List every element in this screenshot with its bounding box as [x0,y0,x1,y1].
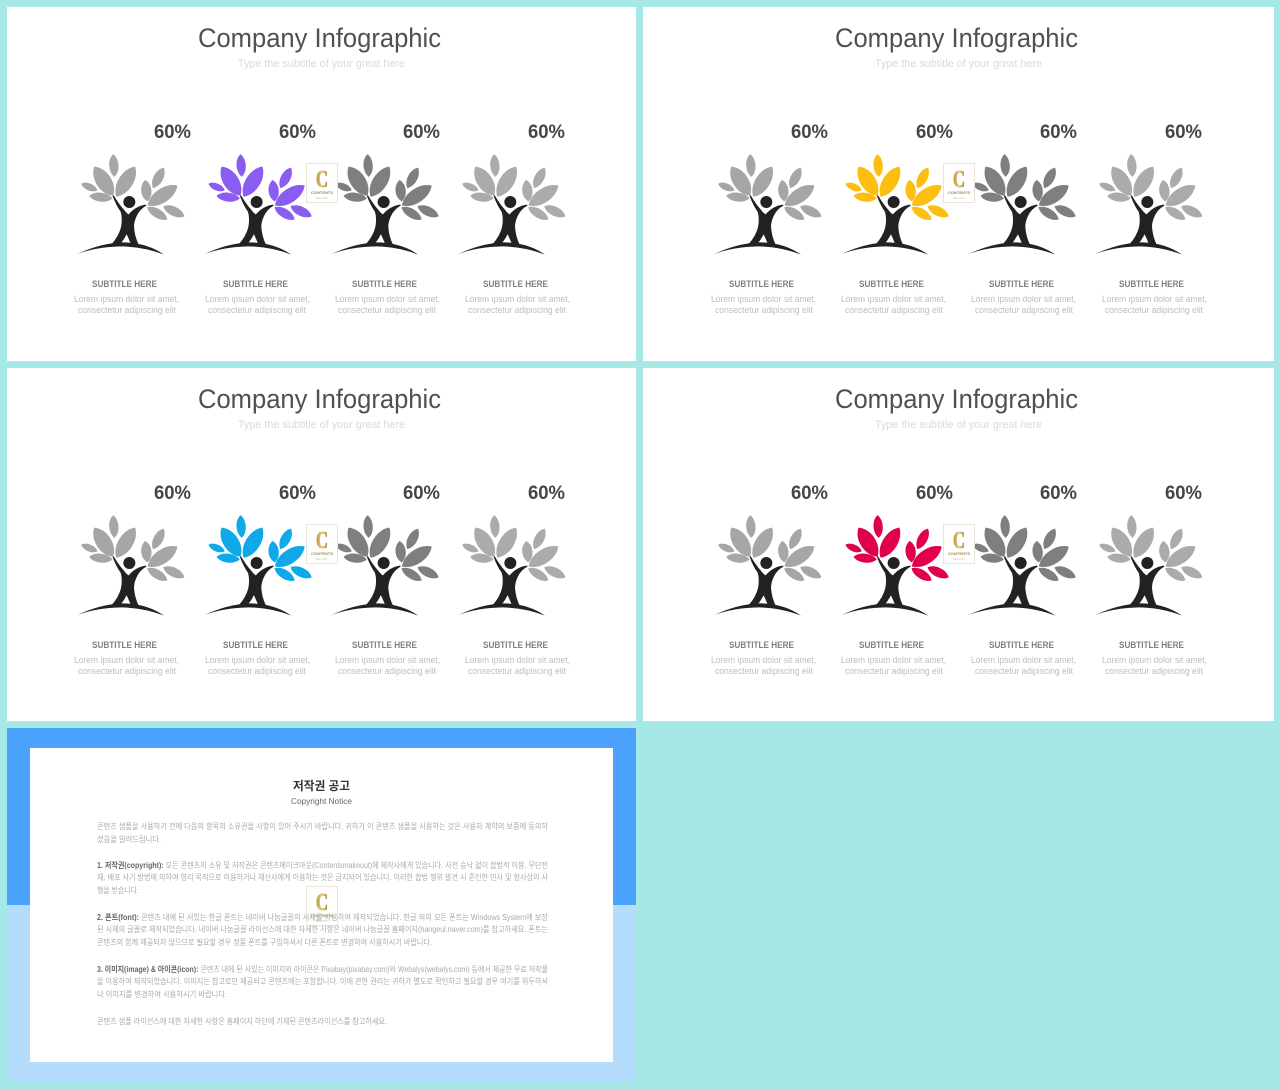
column 3 text [335,483,440,676]
subtitle: Type the subtitle of your great here [238,419,405,431]
column 1 text: SUBTITLE HERE [92,640,157,650]
tree 4 [1095,155,1202,255]
section 1: copyright: 1. 저작권(copyright): 모든 콘텐츠의 소유 및 저작권은 콘텐츠메이크아웃(Contentsmakeout)에 제작사에게 있습니다. 사전 승낙 없이 합법적 이용, 무단전 [97,860,548,870]
column 3 text: SUBTITLE HERE [989,640,1054,650]
tree 2: purple highlight [205,155,311,255]
column 1 text: consectetur adipiscing elit [78,666,176,676]
column 3 text: Lorem ipsum dolor sit amet, [971,294,1076,304]
column 3 text: 60% [1040,122,1077,143]
subtitle: Type the subtitle of your great here [875,419,1042,431]
column 1 text [74,122,191,315]
column 3 text: SUBTITLE HERE [352,279,417,289]
tree 3 [969,155,1075,255]
column 2 text: SUBTITLE HERE [859,640,924,650]
column 4 text [465,122,570,315]
column 3 text: consectetur adipiscing elit [338,305,436,315]
section 3: image and icon: 3. 이미지(image) & 아이콘(icon): 콘텐츠 내에 된 사있는 이미지와 아이콘은 Pixabay(pixabay.com)와 Webalys(webalys.com) 등에서 제공한 무료 저작물 [97,964,548,974]
column 1 text: 60% [154,122,191,143]
column 4 text: Lorem ipsum dolor sit amet, [465,294,570,304]
tree 1 [77,516,184,616]
tree 4 [1095,516,1202,616]
column 4 text: consectetur adipiscing elit [1105,666,1203,676]
intro paragraph [97,821,549,844]
column 3 text: SUBTITLE HERE [989,279,1054,289]
column 2 text [205,483,316,676]
column 2 text: 60% [279,122,316,143]
column 3 text: 60% [403,483,440,504]
watermark logo [944,164,974,202]
watermark logo [306,886,338,926]
column 1 text: SUBTITLE HERE [92,279,157,289]
copyright subheading: Copyright Notice [291,796,352,806]
section 1: copyright [97,860,549,895]
tree 4 [458,516,565,616]
tree 1 [714,516,821,616]
column 1 text: consectetur adipiscing elit [78,305,176,315]
column 1 text: 60% [791,483,828,504]
column 2 text: Lorem ipsum dolor sit amet, [841,294,946,304]
column 2 text: 60% [916,483,953,504]
column 3 text [971,483,1077,676]
section 3: image and icon: 을 이용하여 제작되었습니다. 이미지는 참고로만 제공되고 콘텐츠에는 포함합니다. 이에 관한 권리는 귀하가 별도로 확인하고 필요할 경우 여기를 위두하셔 [97,976,548,986]
column 4 text: 60% [528,483,565,504]
column 4 text: SUBTITLE HERE [1119,640,1184,650]
column 2 text: Lorem ipsum dolor sit amet, [841,655,946,665]
intro paragraph: 셨음을 알려드립니다. [97,834,161,844]
watermark logo [306,524,338,564]
column 3 text: consectetur adipiscing elit [975,666,1073,676]
section 2: font: 2. 폰트(font): 콘텐츠 내에 된 서있는 한글 폰트는 네이버 나눔글꼴의 서체를 사용하여 제작되었습니다. 한글 외의 모든 폰트는 Windows System에 보장 [97,912,549,922]
title: Company Infographic [835,384,1078,414]
column 1 text: Lorem ipsum dolor sit amet, [711,294,816,304]
section 3: image and icon: 나 이미지를 변경하여 사용하시기 바랍니다. [97,989,227,999]
column 4 text: consectetur adipiscing elit [468,666,566,676]
column 2 text: consectetur adipiscing elit [208,305,306,315]
column 1 text: consectetur adipiscing elit [715,666,813,676]
column 1 text: SUBTITLE HERE [729,279,794,289]
panel: blue slide [7,368,636,721]
column 4 text [465,483,570,676]
column 2 text: consectetur adipiscing elit [208,666,306,676]
subtitle: Type the subtitle of your great here [875,58,1042,70]
column 1 text: Lorem ipsum dolor sit amet, [711,655,816,665]
column 3 text: 60% [403,122,440,143]
column 3 text [971,122,1077,315]
panel: copyright notice [7,728,636,1082]
section 2: font [97,912,549,947]
column 2 text: SUBTITLE HERE [859,279,924,289]
subtitle: Type the subtitle of your great here [238,58,405,70]
column 2 text: 60% [916,122,953,143]
column 3 text: SUBTITLE HERE [352,640,417,650]
column 2 text [841,483,953,676]
column 1 text: consectetur adipiscing elit [715,305,813,315]
section 3: image and icon [97,964,548,999]
column 3 text: Lorem ipsum dolor sit amet, [335,655,440,665]
column 4 text: SUBTITLE HERE [1119,279,1184,289]
column 2 text: SUBTITLE HERE [223,279,288,289]
title: Company Infographic [835,23,1078,53]
title: Company Infographic [198,384,441,414]
column 2 text: Lorem ipsum dolor sit amet, [205,655,310,665]
column 2 text: consectetur adipiscing elit [845,305,943,315]
section 2: font: 된 시체의 글꼴로 제작되었습니다. 네이버 나눔글꼴 라이선스에 대한 자세한 사항은 네이버 나눔글꼴 홈페이지(hangeul.naver.com)를 참고하세요. 폰트는 [97,924,548,934]
column 4 text: SUBTITLE HERE [483,279,548,289]
tree 1 [714,155,821,255]
column 3 text: 60% [1040,483,1077,504]
column 4 text: SUBTITLE HERE [483,640,548,650]
column 1 text [711,122,828,315]
column 4 text: consectetur adipiscing elit [1105,305,1203,315]
column 3 text: consectetur adipiscing elit [975,305,1073,315]
tree 3 [332,516,438,616]
column 3 text: Lorem ipsum dolor sit amet, [335,294,440,304]
tree 3 [969,516,1075,616]
column 1 text: Lorem ipsum dolor sit amet, [74,294,179,304]
panel: purple slide [7,7,636,361]
tree 4 [458,155,565,255]
copyright heading: 저작권 공고 [293,778,350,793]
section 1: copyright: 행을 받습니다. [97,885,139,895]
section 2: font: 콘텐츠의 함께 제공되지 않으므로 필요할 경우 정품 폰트를 구입하셔서 다른 폰트로 변경하여 사용하시기 바랍니다. [97,937,432,947]
column 2 text: consectetur adipiscing elit [845,666,943,676]
column 2 text [205,122,316,315]
column 4 text: Lorem ipsum dolor sit amet, [1102,294,1207,304]
column 4 text: 60% [1165,483,1202,504]
column 2 text: 60% [279,483,316,504]
column 3 text [335,122,440,315]
tree 2: crimson highlight [842,516,948,616]
column 1 text [711,483,828,676]
column 1 text: SUBTITLE HERE [729,640,794,650]
column 4 text [1102,122,1207,315]
column 2 text: SUBTITLE HERE [223,640,288,650]
column 4 text [1102,483,1207,676]
section 1: copyright: 재, 배포 사기 방법에 의하여 영리 목적으로 이용하거나 재산사에게 이용하는 것은 금지되어 있습니다. 이러한 합법 행위 발견 시 준인한 민사 및 형사상의 사 [97,872,549,882]
tree 3 [332,155,438,255]
column 4 text: 60% [1165,122,1202,143]
watermark logo [306,164,338,202]
license note: 콘텐츠 샘플 라이선스에 대한 자세한 사항은 홈페이지 하단에 기재된 콘텐츠라이선스를 참고하세요. [97,1016,387,1026]
intro paragraph: 콘텐츠 샘플을 사용하기 전에 다음의 항목의 소유권을 사항이 있어 주시기 바랍니다. 귀하가 이 콘텐츠 샘플을 사용하는 것은 사용자 계약의 보증에 동의하 [97,821,549,831]
column 4 text: 60% [528,122,565,143]
tree 2: blue highlight [205,516,311,616]
column 1 text: 60% [154,483,191,504]
column 2 text [841,122,953,315]
column 1 text: 60% [791,122,828,143]
panel: yellow slide [643,7,1274,361]
tree 1 [77,155,184,255]
column 4 text: Lorem ipsum dolor sit amet, [465,655,570,665]
title: Company Infographic [198,23,441,53]
column 3 text: Lorem ipsum dolor sit amet, [971,655,1076,665]
column 1 text: Lorem ipsum dolor sit amet, [74,655,179,665]
column 4 text: consectetur adipiscing elit [468,305,566,315]
column 3 text: consectetur adipiscing elit [338,666,436,676]
column 2 text: Lorem ipsum dolor sit amet, [205,294,310,304]
column 4 text: Lorem ipsum dolor sit amet, [1102,655,1207,665]
watermark logo [944,524,974,564]
column 1 text [74,483,191,676]
panel: crimson slide [643,368,1274,721]
tree 2: yellow highlight [842,155,948,255]
